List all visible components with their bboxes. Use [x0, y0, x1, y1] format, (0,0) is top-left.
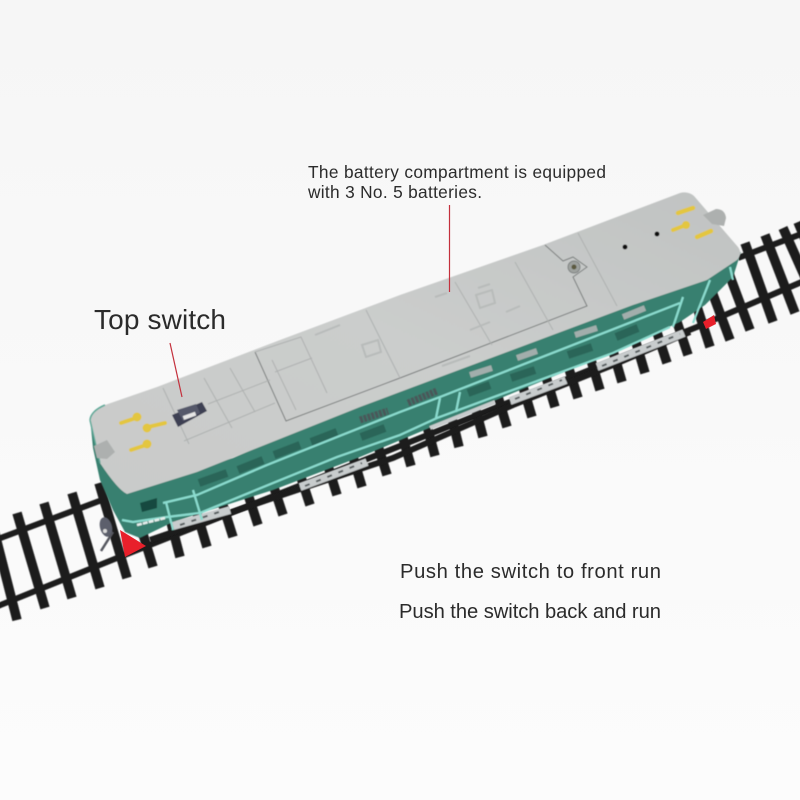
text: push instructions: Push the switch to front run	[400, 561, 661, 583]
holes	[622, 244, 628, 250]
cab logo	[137, 518, 165, 525]
front coupling left	[94, 440, 115, 459]
battery cover seam	[255, 245, 587, 421]
roof-side panels	[470, 308, 645, 375]
roof	[90, 192, 740, 494]
roof panel lines	[163, 233, 617, 444]
heading: top switch: Top switch	[94, 304, 226, 335]
coupler left	[98, 516, 114, 551]
text: battery compartment	[307, 162, 606, 202]
red wheel guard left	[120, 530, 146, 557]
roof panel marks	[315, 284, 520, 366]
bogie detail	[180, 334, 680, 525]
black chassis shadow	[150, 332, 690, 540]
front coupling right	[703, 209, 726, 226]
text: push instructions	[399, 561, 661, 623]
railway track	[0, 222, 800, 620]
vents	[360, 391, 437, 420]
left horns	[121, 413, 165, 450]
leader line: switch	[170, 343, 182, 397]
green body	[90, 252, 741, 538]
text: battery compartment: with 3 No. 5 batteries.	[307, 182, 482, 202]
handrails	[122, 267, 733, 530]
top switch	[172, 402, 207, 427]
red wheel guard right	[703, 315, 716, 329]
screw	[568, 261, 580, 273]
bogies	[173, 333, 684, 526]
leader line: battery	[448, 205, 450, 292]
cab window	[140, 498, 157, 512]
windows	[199, 328, 638, 483]
text: battery compartment: The battery compartment is equipped	[308, 162, 606, 182]
locomotive	[90, 192, 741, 540]
roof left rim	[90, 405, 105, 463]
text: push instructions: Push the switch back and run	[399, 601, 661, 623]
right horns	[673, 208, 711, 237]
